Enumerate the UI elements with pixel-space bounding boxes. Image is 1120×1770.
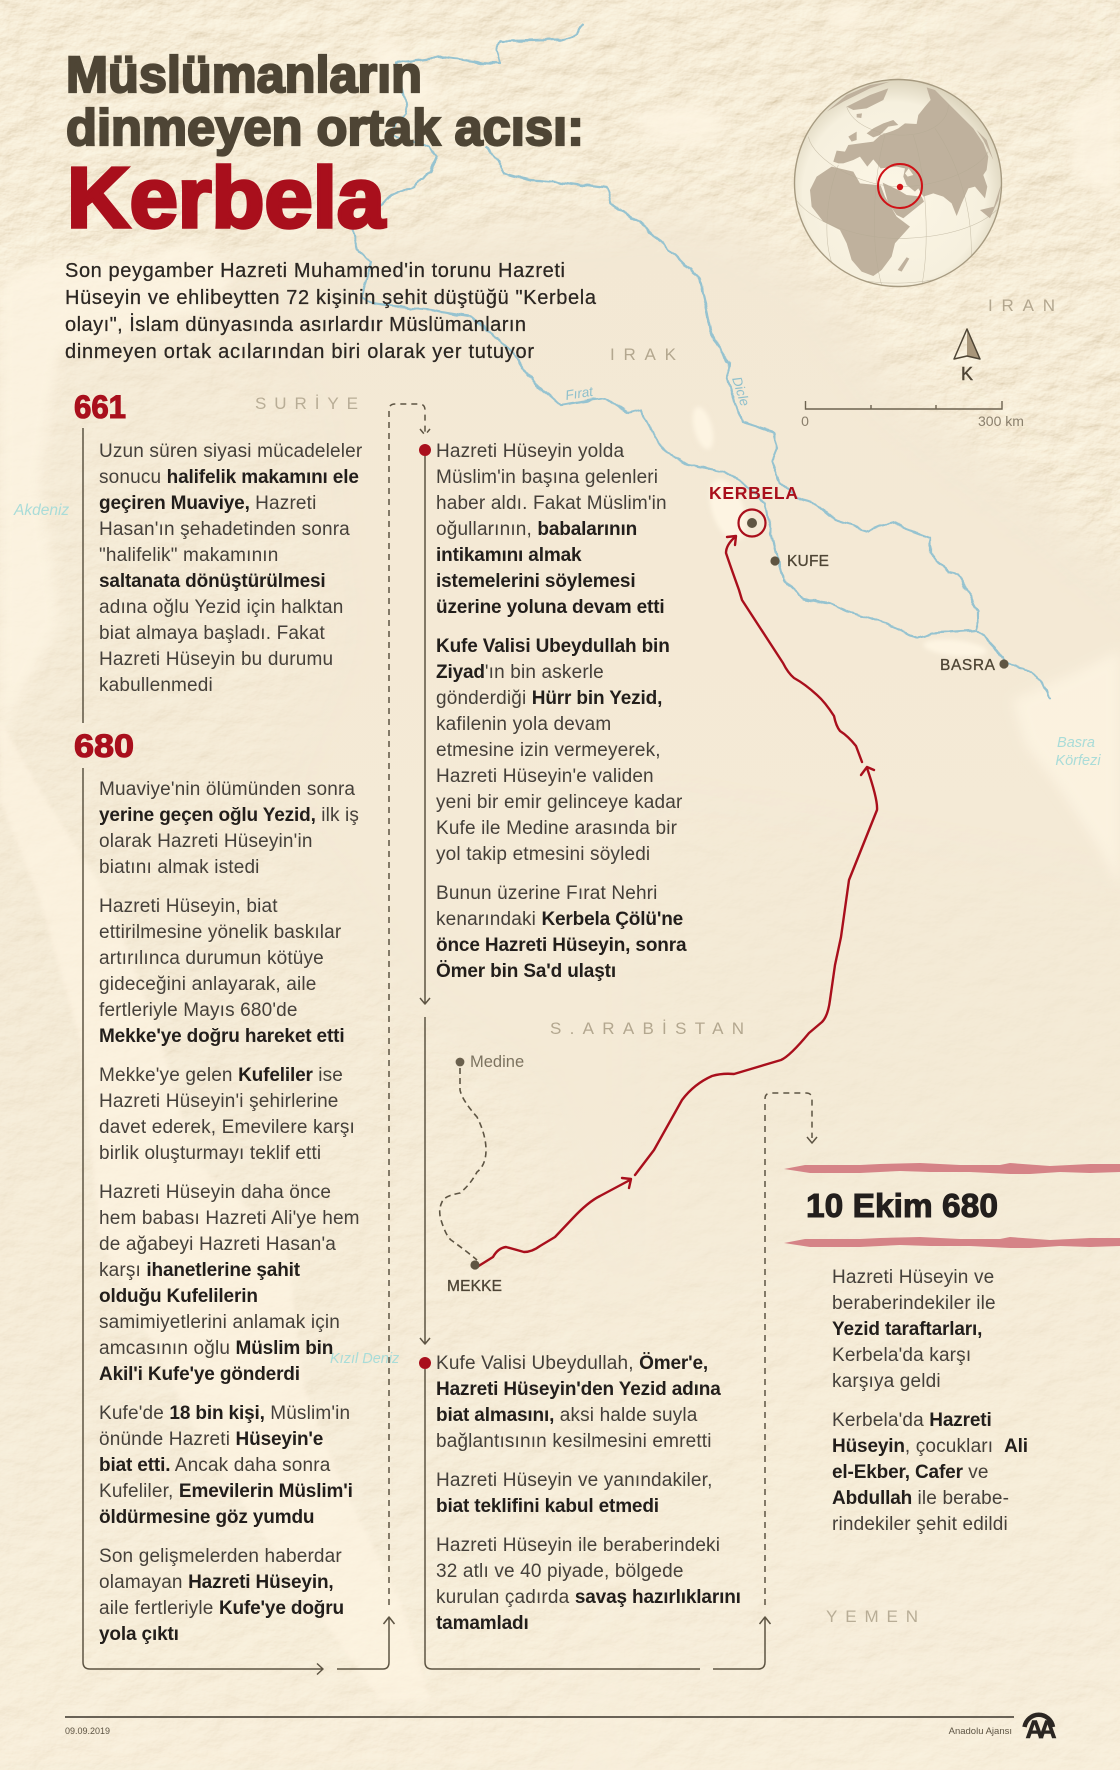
text block: 680: öldürmesine göz yumdu <box>99 1507 314 1528</box>
text block: 10 Ekim 680 <box>832 1267 1028 1535</box>
text block: 661: adına oğlu Yezid için halktan <box>99 597 343 618</box>
intro paragraph: Hüseyin ve ehlibeytten 72 kişinin şehit düştüğü "Kerbela <box>65 287 597 309</box>
text block: Ubeydullah's order: Kufe Valisi Ubeydullah, Ömer'e, <box>436 1353 708 1374</box>
text block: 661: kabullenmedi <box>99 675 213 696</box>
footer date: 09.09.2019 <box>65 1726 110 1736</box>
brush stroke: bottom <box>784 1237 1120 1248</box>
text block: 10 Ekim 680: Abdullah ile berabe- <box>832 1488 1009 1509</box>
marker: Basra: BASRA <box>940 657 996 674</box>
text block: 680: aile fertleriyle Kufe'ye doğru <box>99 1598 344 1619</box>
text block: Ubeydullah's order: Hazreti Hüseyin'den Yezid adına <box>436 1379 721 1400</box>
connector: column one timeline <box>83 404 430 1674</box>
text block: Ubeydullah's order: biat teklifini kabul etmedi <box>436 1496 659 1517</box>
text block: 680: Hazreti Hüseyin'i şehirlerine <box>99 1091 339 1112</box>
intro paragraph: dinmeyen ortak acılarından biri olarak yer tutuyor <box>65 341 534 363</box>
text block: Ubeydullah's order: biat almasını, aksi halde suyla <box>436 1405 697 1426</box>
label: S. Arabistan: S.ARABİSTAN <box>550 1019 744 1038</box>
text block: road to Kufe: üzerine yoluna devam etti <box>436 597 665 618</box>
title: dinmeyen ortak acısı: <box>66 99 584 156</box>
scale bar: 0 <box>801 413 809 429</box>
route: Medine to Mekke <box>440 1068 486 1260</box>
text block: road to Kufe: Müslim'in başına gelenleri <box>436 467 658 488</box>
label: Fırat: Fırat <box>564 384 595 403</box>
text block: Ubeydullah's order: tamamladı <box>436 1613 529 1634</box>
text block: 680 <box>99 779 360 1645</box>
text block: 680: karşı ihanetlerine şahit <box>99 1260 300 1281</box>
text block: 10 Ekim 680: Kerbela'da karşı <box>832 1345 971 1366</box>
text block: road to Kufe: Ziyad'ın bin askerle <box>436 662 604 683</box>
route: Mekke to Kerbela <box>477 536 877 1267</box>
timeline dot: second <box>419 1357 431 1369</box>
label: Iran: IRAN <box>988 296 1055 315</box>
text block: road to Kufe: gönderdiği Hürr bin Yezid, <box>436 688 662 709</box>
locator globe <box>794 80 1002 287</box>
text block: road to Kufe: önce Hazreti Hüseyin, sonra <box>436 935 686 956</box>
label: Akdeniz: Akdeniz <box>13 502 69 519</box>
text block: road to Kufe: Hazreti Hüseyin yolda <box>436 441 624 462</box>
text block: 10 Ekim 680: Hüseyin, çocukları Ali <box>832 1436 1028 1457</box>
text block: Ubeydullah's order: Hazreti Hüseyin ve yanındakiler, <box>436 1470 713 1491</box>
intro paragraph: Son peygamber Hazreti Muhammed'in torunu Hazreti <box>65 260 565 282</box>
text block: 680: Hazreti Hüseyin daha önce <box>99 1182 331 1203</box>
title <box>66 46 584 246</box>
label: Basra Körfezi: Basra <box>1057 735 1095 751</box>
text block: 680: Kufe'de 18 bin kişi, Müslim'in <box>99 1403 350 1424</box>
text block: 680: olarak Hazreti Hüseyin'in <box>99 831 313 852</box>
text block: road to Kufe <box>436 441 687 982</box>
text block: 680: amcasının oğlu Müslim bin <box>99 1338 333 1359</box>
text block: Ubeydullah's order: 32 atlı ve 40 piyade, bölgede <box>436 1561 684 1582</box>
rivers <box>352 23 1051 698</box>
text block: Ubeydullah's order: kurulan çadırda savaş hazırlıklarını <box>436 1587 741 1608</box>
text block: 10 Ekim 680: rindekiler şehit edildi <box>832 1514 1008 1535</box>
timeline dot: first <box>419 444 431 456</box>
text block: 10 Ekim 680: karşıya geldi <box>832 1371 941 1392</box>
text block: 10 Ekim 680: beraberindekiler ile <box>832 1293 996 1314</box>
heading: year 661: 661 <box>74 389 126 425</box>
marker: Mekke: MEKKE <box>447 1278 502 1295</box>
text block: road to Kufe: Hazreti Hüseyin'e validen <box>436 766 654 787</box>
text block: Ubeydullah's order: Hazreti Hüseyin ile beraberindeki <box>436 1535 720 1556</box>
text block: 10 Ekim 680: el-Ekber, Cafer ve <box>832 1462 989 1483</box>
text block: road to Kufe: istemelerini söylemesi <box>436 571 635 592</box>
text block: 680: biat etti. Ancak daha sonra <box>99 1455 330 1476</box>
text block: 680: Mekke'ye gelen Kufeliler ise <box>99 1065 343 1086</box>
logo: AA: AA <box>1025 1716 1056 1744</box>
text block: 661 <box>99 441 362 696</box>
text block: 680: yerine geçen oğlu Yezid, ilk iş <box>99 805 359 826</box>
title: Müslümanların <box>66 46 422 103</box>
text block: 680: Hazreti Hüseyin, biat <box>99 896 278 917</box>
text block: 680: Muaviye'nin ölümünden sonra <box>99 779 355 800</box>
text block: 680: Son gelişmelerden haberdar <box>99 1546 342 1567</box>
text block: 680: hem babası Hazreti Ali'ye hem <box>99 1208 360 1229</box>
heading: 10 Ekim 680: 10 Ekim 680 <box>806 1187 998 1224</box>
label: Yemen: YEMEN <box>826 1607 918 1626</box>
icon: north arrow <box>954 329 980 384</box>
scale bar: 300 km <box>978 413 1024 429</box>
text block: 680: fertleriyle Mayıs 680'de <box>99 1000 298 1021</box>
text block: road to Kufe: etmesine izin vermeyerek, <box>436 740 661 761</box>
marker: Mekke <box>447 1260 502 1295</box>
text block: road to Kufe: kafilenin yola devam <box>436 714 611 735</box>
text block: road to Kufe: intikamını almak <box>436 545 581 566</box>
text block: Ubeydullah's order: bağlantısının kesilmesini emretti <box>436 1431 712 1452</box>
text block: 680: Kufeliler, Emevilerin Müslim'i <box>99 1481 353 1502</box>
label: Dicle: Dicle <box>729 375 753 408</box>
text block: 661: "halifelik" makamının <box>99 545 278 566</box>
text block: road to Kufe: Kufe ile Medine arasında bir <box>436 818 677 839</box>
text block: 661: Hazreti Hüseyin bu durumu <box>99 649 333 670</box>
text block: 661: saltanata dönüştürülmesi <box>99 571 326 592</box>
text block: 661: sonucu halifelik makamını ele <box>99 467 359 488</box>
text block: 680: artırılınca durumun kötüye <box>99 948 324 969</box>
label: KERBELA: KERBELA <box>709 483 798 503</box>
footer credit: Anadolu Ajansı <box>949 1726 1012 1737</box>
text block: 680: yola çıktı <box>99 1624 179 1645</box>
text block: road to Kufe: Kufe Valisi Ubeydullah bin <box>436 636 670 657</box>
intro paragraph <box>65 260 597 363</box>
text block: 680: birlik oluşturmayı teklif etti <box>99 1143 321 1164</box>
text block: 680: olduğu Kufelilerin <box>99 1286 258 1307</box>
text block: 680: önünde Hazreti Hüseyin'e <box>99 1429 323 1450</box>
label: Suriye: SURİYE <box>255 394 358 413</box>
text block: 680: Akil'i Kufe'ye gönderdi <box>99 1364 300 1385</box>
text block: road to Kufe: oğullarının, babalarının <box>436 519 637 540</box>
text block: 661: biat almaya başladı. Fakat <box>99 623 325 644</box>
footer rule <box>65 1716 1014 1718</box>
intro paragraph: olayı", İslam dünyasında asırlardır Müslümanların <box>65 313 526 336</box>
text block: 680: biatını almak istedi <box>99 857 260 878</box>
text block: 680: olamayan Hazreti Hüseyin, <box>99 1572 334 1593</box>
text block: 680: de ağabeyi Hazreti Hasan'a <box>99 1234 336 1255</box>
text block: 10 Ekim 680: Yezid taraftarları, <box>832 1319 982 1340</box>
connector: column two timeline <box>420 456 817 1669</box>
text block: 661: Uzun süren siyasi mücadeleler <box>99 441 362 462</box>
text block: 680: davet ederek, Emevilere karşı <box>99 1117 355 1138</box>
text block: 661: Hasan'ın şehadetinden sonra <box>99 519 350 540</box>
brush stroke: top <box>784 1163 1120 1174</box>
text block: road to Kufe: yol takip etmesini söyledi <box>436 844 650 865</box>
marker: Kerbela <box>738 510 766 536</box>
text block: road to Kufe: Ömer bin Sa'd ulaştı <box>436 961 616 982</box>
icon: north arrow: K <box>961 364 973 384</box>
text block: road to Kufe: Bunun üzerine Fırat Nehri <box>436 883 658 904</box>
text block: road to Kufe: haber aldı. Fakat Müslim'in <box>436 493 667 514</box>
text block: Ubeydullah's order <box>436 1352 741 1634</box>
marker: Kufe: KUFE <box>787 553 829 570</box>
text block: road to Kufe: kenarındaki Kerbela Çölü'ne <box>436 909 683 930</box>
label: Basra Körfezi: Körfezi <box>1055 753 1101 769</box>
marker: Medine: Medine <box>470 1053 524 1071</box>
label: Irak: IRAK <box>610 345 677 364</box>
scale bar <box>801 401 1024 429</box>
text block: 680: Mekke'ye doğru hareket etti <box>99 1026 344 1047</box>
text block: 680: gideceğini anlayarak, aile <box>99 974 317 995</box>
heading: year 680: 680 <box>74 728 134 764</box>
text block: 680: samimiyetlerini anlamak için <box>99 1312 340 1333</box>
text block: 10 Ekim 680: Kerbela'da Hazreti <box>832 1410 992 1431</box>
text block: 661: geçiren Muaviye, Hazreti <box>99 493 316 514</box>
text block: 680: ettirilmesine yönelik baskılar <box>99 922 341 943</box>
title: Kerbela <box>67 151 386 246</box>
label: Kızıl Deniz: Kızıl Deniz <box>330 1351 400 1367</box>
text block: road to Kufe: yeni bir emir gelinceye kadar <box>436 792 682 813</box>
text block: 10 Ekim 680: Hazreti Hüseyin ve <box>832 1267 994 1288</box>
